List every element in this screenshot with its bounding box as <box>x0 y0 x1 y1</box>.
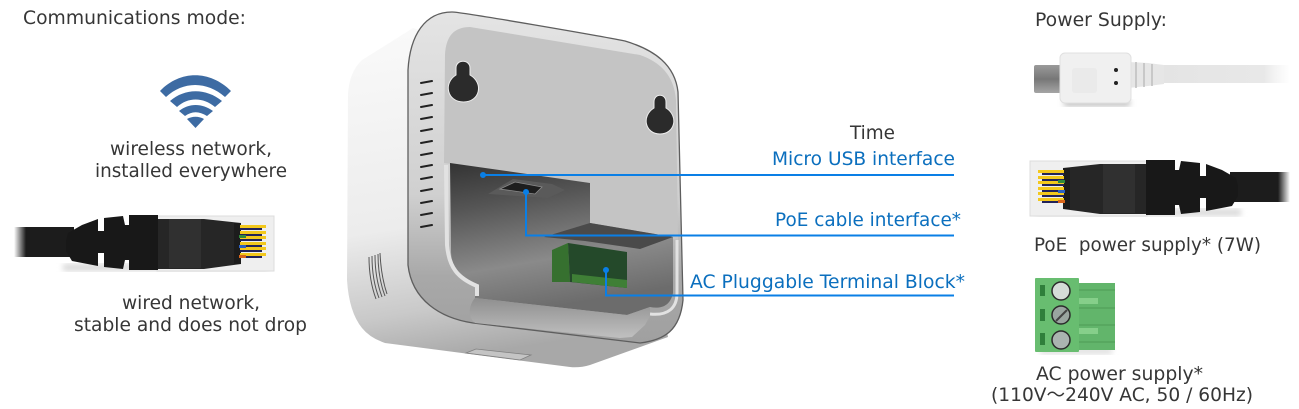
ethernet port <box>488 179 565 198</box>
recess <box>450 163 673 315</box>
label: time: Time <box>849 122 895 144</box>
device body <box>347 28 668 367</box>
text: wired network: stable and does not drop <box>74 314 307 336</box>
vent slots <box>421 81 432 227</box>
connector line: poe <box>524 190 954 236</box>
ledge <box>470 298 650 338</box>
icon: poe ethernet cable <box>1030 160 1290 216</box>
label: poe power supply: PoE power supply* (7W) <box>1034 234 1261 256</box>
label: micro usb: Micro USB interface <box>772 148 955 170</box>
icon: green terminal block <box>1035 278 1115 354</box>
connector line: ac terminal <box>604 268 954 296</box>
text: wireless network: installed everywhere <box>95 160 287 182</box>
bottom button <box>466 349 531 360</box>
label: ac terminal block: AC Pluggable Terminal Block* <box>690 271 965 293</box>
label: ac power supply: AC power supply* <box>1036 363 1203 385</box>
inner panel <box>444 27 678 240</box>
text: wired network: wired network, <box>122 292 260 314</box>
keyhole left <box>448 61 479 102</box>
label: ac power supply <box>991 363 1253 406</box>
connector line: micro usb <box>481 173 954 177</box>
icon: wifi <box>160 75 231 128</box>
device front rim <box>408 12 683 343</box>
title: communications mode: Communications mode: <box>23 7 246 29</box>
recess light edge <box>446 165 477 296</box>
icon: ethernet cable, wired network <box>14 215 274 271</box>
speaker slots <box>369 253 387 299</box>
device: gateway back view <box>347 12 683 367</box>
label: ac power supply: (110V～240V AC, 50 / 60Hz) <box>991 384 1253 406</box>
text: wireless network: wireless network, <box>110 138 272 160</box>
heading: power supply: Power Supply: <box>1035 9 1167 31</box>
text: wireless network <box>95 138 287 182</box>
icon: micro usb cable <box>1034 53 1290 106</box>
text: wired network <box>74 292 307 336</box>
label: poe: PoE cable interface* <box>775 209 961 231</box>
terminal block on device <box>552 243 627 288</box>
keyhole right <box>646 95 674 134</box>
